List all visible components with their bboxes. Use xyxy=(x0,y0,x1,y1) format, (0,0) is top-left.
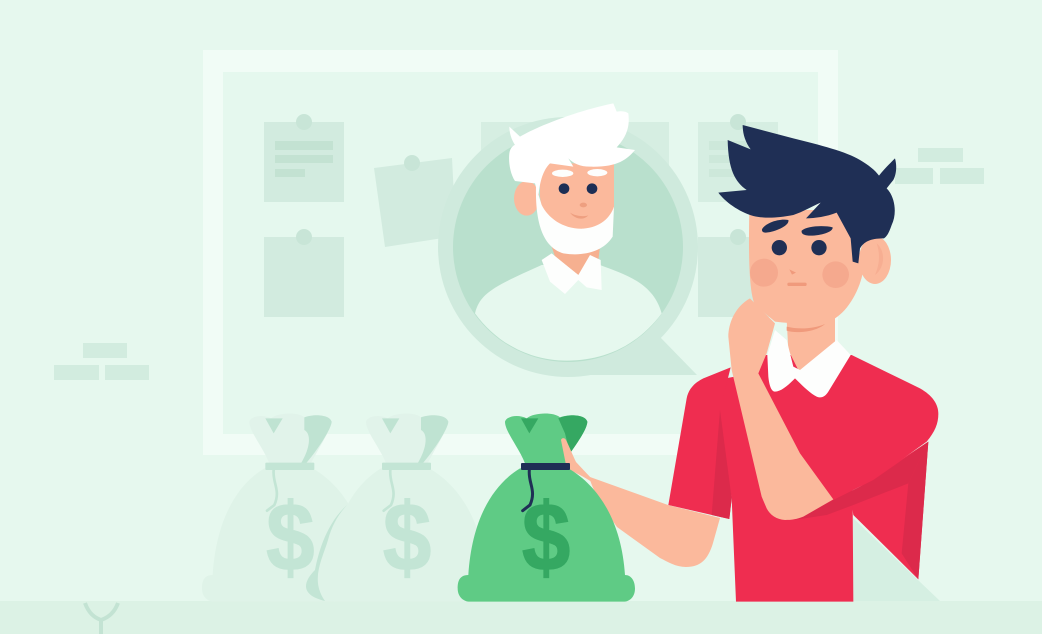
money bag main: $ xyxy=(522,484,570,592)
old man beard xyxy=(536,187,614,254)
bricks left xyxy=(54,343,149,380)
note with text lines xyxy=(264,114,344,202)
money bag ghost right xyxy=(328,414,496,602)
bag edge shadow xyxy=(306,505,347,601)
floor shadow xyxy=(853,518,940,601)
man hair xyxy=(718,125,896,263)
money bag ghost right: $ xyxy=(383,484,431,592)
left sleeve fold xyxy=(712,410,732,519)
old man ear xyxy=(514,181,539,216)
man eyebrows xyxy=(762,220,833,236)
young man xyxy=(668,125,938,602)
man collar xyxy=(767,330,851,397)
old man eyes xyxy=(559,183,597,194)
left arm reaching to bag xyxy=(560,439,720,567)
old man collar xyxy=(542,253,602,294)
money bag ghost left: $ xyxy=(266,484,315,592)
tilted note xyxy=(374,155,456,247)
back sleeve shadow xyxy=(902,442,928,579)
old man hair xyxy=(509,103,635,197)
man hand and forearm xyxy=(728,298,833,520)
note upper right xyxy=(698,114,778,202)
thought bubble xyxy=(438,117,698,377)
money bag ghost left xyxy=(202,414,379,602)
bag rope xyxy=(521,463,570,470)
torso xyxy=(717,355,853,602)
man ear xyxy=(859,236,891,284)
hand gripping bag xyxy=(561,438,592,482)
man face xyxy=(749,210,863,323)
floor xyxy=(0,601,1042,634)
old man eyebrows xyxy=(552,169,607,177)
man neck xyxy=(787,313,835,373)
plant sprout xyxy=(85,603,118,634)
money bag main xyxy=(458,414,635,602)
notes behind bubble xyxy=(481,122,669,202)
old man in bubble xyxy=(475,103,662,361)
old man shirt xyxy=(475,265,662,361)
note lower right xyxy=(698,229,778,317)
man nose and mouth xyxy=(787,269,825,332)
pin board xyxy=(203,50,838,455)
upper arm xyxy=(758,355,938,500)
old man neck xyxy=(552,247,600,275)
man eyes xyxy=(772,240,827,255)
old man nose and smile xyxy=(570,203,588,219)
back sleeve xyxy=(850,442,928,579)
left sleeve xyxy=(668,367,732,519)
bricks right xyxy=(895,148,984,184)
blank note lower left xyxy=(264,229,344,317)
sleeve underside shadow xyxy=(793,442,928,520)
old man face xyxy=(540,163,614,231)
man cheeks xyxy=(750,259,849,288)
